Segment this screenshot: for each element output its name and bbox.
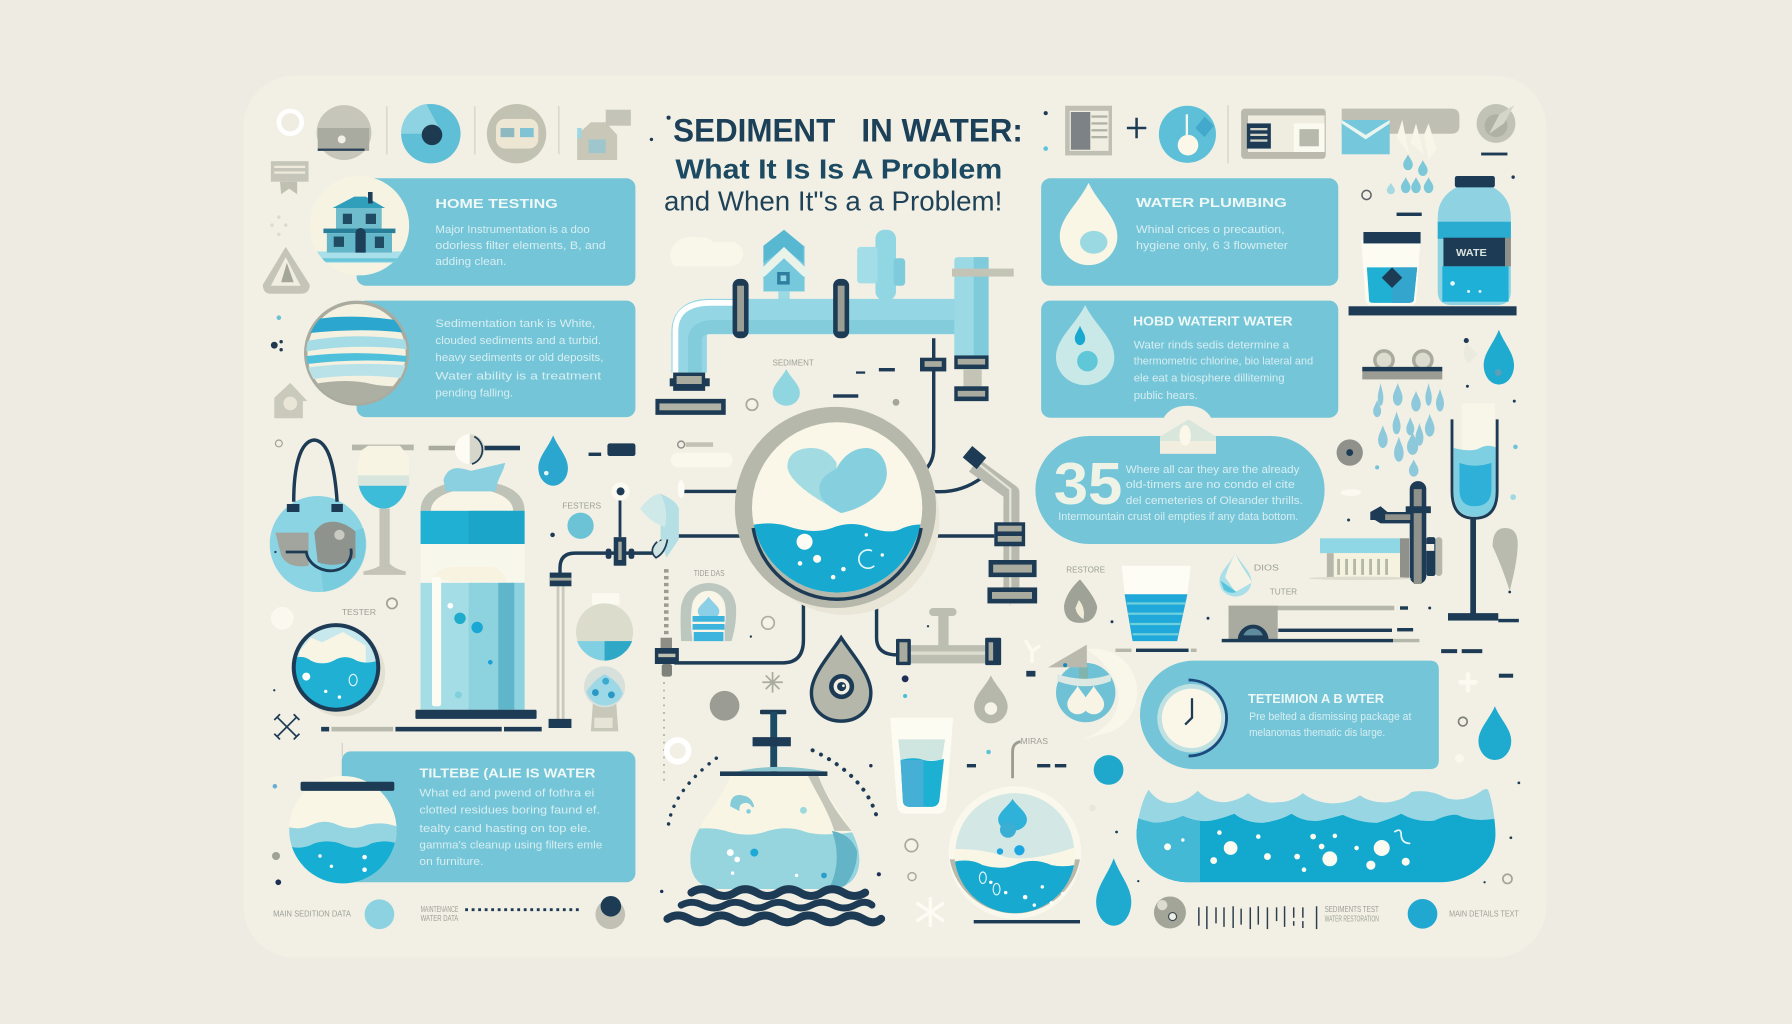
center bottom markers (660, 750, 991, 927)
icon: water gauge (291, 625, 385, 717)
T valve pipe (896, 608, 1001, 665)
cup (1361, 232, 1421, 305)
panel: testing time (1140, 661, 1439, 769)
icon: bowl (289, 776, 397, 884)
heading: WATER PLUMBING (1136, 196, 1287, 210)
icon: tab (1160, 419, 1216, 454)
right top small marks (650, 111, 1515, 216)
title (664, 113, 1023, 216)
label: tester (271, 598, 397, 630)
icon: blue drop (538, 435, 568, 486)
footer left: MAIN SEDITION DATA (273, 910, 351, 919)
body text: odorless filter elements, B, and (435, 240, 606, 252)
house tower (755, 230, 813, 303)
icon: clock (1157, 680, 1227, 756)
icon: drop dial (1159, 106, 1216, 163)
top pipe system (655, 230, 1014, 415)
sediment sphere (950, 793, 1080, 924)
body text: Water rinds sedis determine a (1134, 340, 1290, 352)
body text (1136, 224, 1288, 252)
elbow pipe (689, 317, 966, 373)
title: What It Is Is A Problem (675, 153, 1002, 184)
body text: gamma's cleanup using filters emle (419, 840, 602, 852)
body text (435, 224, 606, 268)
icon: sediment bands circle (303, 301, 411, 411)
labels: TUTER (1270, 587, 1297, 596)
bottle: WATE (1456, 248, 1487, 259)
icon: plus (1127, 118, 1146, 138)
rim arc (753, 528, 921, 599)
icon: document (1065, 106, 1112, 155)
labels (1254, 563, 1297, 596)
label: testers with blue circle (550, 502, 601, 539)
text: WATER RESTORATION (1325, 915, 1379, 924)
panel: home testing (309, 176, 635, 286)
base line (1115, 649, 1197, 652)
body text (1134, 340, 1313, 402)
drop (1096, 858, 1131, 926)
dotted arcs (669, 750, 878, 824)
icon: cross tools (274, 714, 299, 739)
panel: filter note (286, 743, 635, 891)
body text (419, 788, 602, 868)
big flask (686, 710, 869, 891)
top right icon row (1065, 104, 1515, 194)
main sediment circle (735, 407, 939, 615)
body text: heavy sediments or old deposits, (435, 352, 603, 364)
icon: envelope with tap (1342, 109, 1459, 194)
big number: 35 (1054, 450, 1122, 517)
body text: adding clean. (435, 256, 506, 268)
label and drop below pipe (746, 359, 899, 410)
grey eye (1154, 896, 1186, 928)
footer right (1089, 755, 1519, 929)
body text: Whinal crices o precaution, (1136, 224, 1285, 236)
body text: melanomas thematic dis large. (1249, 727, 1385, 739)
body text: Where all car they are the already (1126, 464, 1300, 476)
body text: thermometric chlorine, bio lateral and (1134, 356, 1313, 368)
icon: grey drop (974, 675, 1008, 723)
icon: building (1309, 538, 1411, 580)
cloud and decoration (670, 237, 743, 467)
icon: small flask (576, 593, 633, 661)
icon: shower circle (1048, 645, 1137, 741)
body text: on furniture. (419, 856, 483, 868)
small marks (1089, 805, 1139, 882)
icon: drop valve (811, 638, 871, 721)
right margin icons (1455, 674, 1520, 883)
footer left: MAINTENANCE (421, 905, 458, 914)
body text: Major Instrumentation is a doo (435, 224, 590, 236)
body text (435, 318, 603, 400)
icon: faucet (1370, 481, 1442, 584)
pipe stand with valve (549, 482, 640, 728)
bubbles (797, 533, 884, 579)
floor line (321, 727, 542, 731)
big bottle (415, 463, 537, 719)
icon: speech note (271, 161, 309, 194)
body text: public hears. (1134, 390, 1198, 402)
icon: water bottle and cup on shelf (1349, 176, 1517, 315)
icon: shower head (1362, 351, 1444, 477)
footer left (273, 896, 625, 929)
heading: HOME TESTING (435, 197, 558, 211)
body text: hygiene only, 6 3 flowmeter (1136, 240, 1288, 252)
icon: ball valve (429, 434, 520, 464)
left margin icons (263, 215, 310, 447)
dark waves (667, 889, 881, 922)
body text: Sedimentation tank is White, (435, 318, 595, 330)
body text: Pre belted a dismissing package at (1249, 711, 1411, 723)
body text: pending falling. (435, 388, 513, 400)
apparatus (1222, 606, 1419, 642)
icon: filter shield: TIDE DAS (694, 569, 725, 578)
title: SEDIMENT IN WATER: (673, 113, 1023, 149)
panel: water plumbing (1041, 178, 1338, 286)
body text: Intermountain crust oil empties if any data bottom. (1058, 511, 1298, 523)
label: RESTORE (1066, 566, 1105, 575)
main card (243, 75, 1546, 958)
footer left: WATER DATA (421, 914, 459, 923)
dashes top of left row (589, 443, 635, 456)
icon: small drop (1219, 553, 1251, 597)
water (754, 523, 920, 593)
panel: 35 stat (1035, 406, 1325, 544)
wires (640, 338, 994, 663)
left bottom markers (272, 551, 281, 885)
lower left valve chain (655, 569, 679, 785)
wire valve loop left (640, 480, 685, 558)
title: and When It''s a a Problem! (664, 185, 1002, 216)
heading: HOBD WATERIT WATER (1133, 315, 1293, 329)
icon: goblet (352, 445, 414, 575)
label: MAIN DETAILS TEXT (1449, 910, 1519, 919)
base flange (673, 373, 705, 391)
water tank with bubbles (1136, 789, 1496, 882)
icon: tinted drop (1056, 305, 1114, 385)
panel: sediment layers (303, 301, 635, 417)
clamps (733, 279, 749, 338)
body text: ele eat a biosphere dilliteming (1134, 373, 1285, 385)
lower right row: leaf, cup, drop, apparatus (1064, 553, 1511, 653)
body text: What ed and pwend of fothra ei (419, 788, 594, 800)
barcode (1199, 906, 1317, 929)
label: tester: TESTER (342, 608, 376, 617)
body text: old-timers are no condo el cite (1126, 479, 1295, 491)
icon: grey dial (1477, 104, 1515, 155)
blue ball (1094, 755, 1123, 785)
body text (1058, 464, 1303, 523)
cactus column (857, 230, 905, 301)
body text: tealty cand hasting on top ele. (419, 823, 591, 835)
elbow with flanges right (963, 446, 1037, 606)
label and drop below pipe: SEDIMENT (773, 359, 814, 368)
icon: small globe (584, 666, 625, 731)
text: SEDIMENTS TEST (1325, 905, 1379, 914)
text (1325, 905, 1379, 924)
blue circle (1408, 899, 1437, 929)
right vertical pipe (954, 257, 989, 358)
icon: grey leaf right (1493, 528, 1518, 591)
bottle (1438, 176, 1511, 305)
misc center icons (667, 625, 1040, 762)
icon: drinking glass (890, 718, 953, 814)
body text (1249, 711, 1411, 739)
grey pipe label: MIRAS (1021, 737, 1048, 746)
icon: grey window (1241, 109, 1326, 159)
body text: clotted residues boring faund ef. (419, 805, 600, 817)
panel: hard water (1041, 301, 1338, 418)
icon: grey leaf (1064, 579, 1097, 623)
wire valve upper right (920, 358, 946, 371)
icon: cream drop (1060, 183, 1117, 265)
labels: DIOS (1254, 563, 1279, 572)
icon: filter shield (681, 569, 774, 641)
icon: striped cup (1122, 566, 1191, 641)
hearts (787, 448, 887, 513)
heading: TILTEBE (ALIE IS WATER (419, 767, 595, 781)
grey pipe label (967, 737, 1066, 778)
body text: clouded sediments and a turbid. (435, 335, 601, 347)
body text: Water ability is a treatment (435, 370, 601, 382)
heading: TETEIMION A B WTER (1248, 692, 1384, 706)
top left icon row (279, 104, 631, 163)
body text: del cemeteries of Oleander thrills. (1126, 495, 1303, 507)
shelf (1349, 306, 1517, 315)
icon: test tube on stand (1448, 403, 1519, 622)
icon: house in circle (317, 178, 410, 276)
infographic (262, 104, 1520, 930)
label: testers with blue circle: FESTERS (562, 502, 601, 511)
icon: bag in blue circle (270, 440, 366, 592)
icon: right blue drop (1337, 330, 1518, 521)
